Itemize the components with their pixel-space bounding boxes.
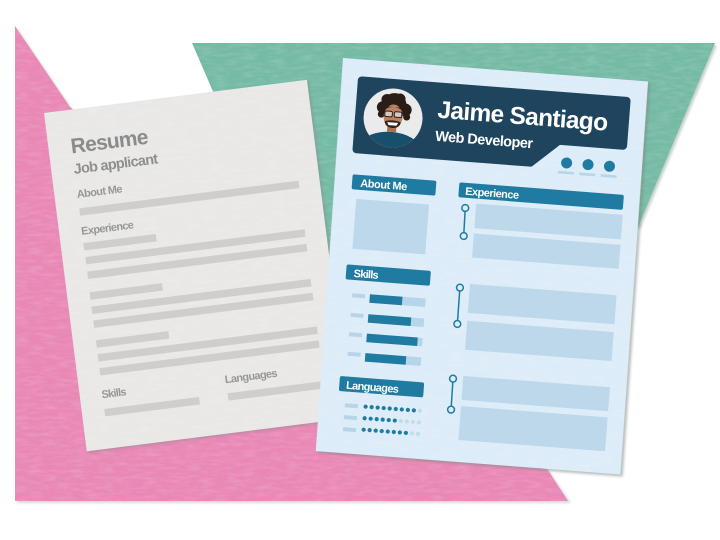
panel: plain grey resume [44,80,352,453]
skills bars [347,293,426,366]
section: languages: Languages [224,368,278,386]
about me heading [352,174,436,196]
heading: Resume: Resume [69,126,150,158]
name: Jaime Santiago [437,97,609,137]
section: about me: About Me [76,183,123,201]
languages heading: Languages [346,380,399,396]
job title: Web Developer [435,129,534,152]
panel: designed blue resume [313,58,653,477]
photo: smiling man with curly hair and glasses [364,88,423,148]
experience group 2 [452,283,617,361]
section: about me [76,161,299,216]
experience heading: Experience [465,186,519,202]
experience heading [458,182,624,210]
language ratings [343,403,422,437]
green background shape [192,43,717,300]
skills heading: Skills [353,268,379,282]
header banner [352,76,631,174]
subheading: Job applicant: Job applicant [73,151,159,178]
experience group 1 [458,203,623,269]
section: skills: Skills [101,386,127,401]
about me text block [352,199,429,254]
experience group 3 [445,375,610,451]
skills heading [346,264,431,286]
section: languages [224,362,328,401]
contact icons [558,157,618,178]
section: skills [101,377,200,417]
pink background shape [15,26,571,503]
languages heading [339,376,424,398]
section: experience [81,198,320,376]
section: experience: Experience [81,219,135,238]
about me heading: About Me [360,178,408,193]
